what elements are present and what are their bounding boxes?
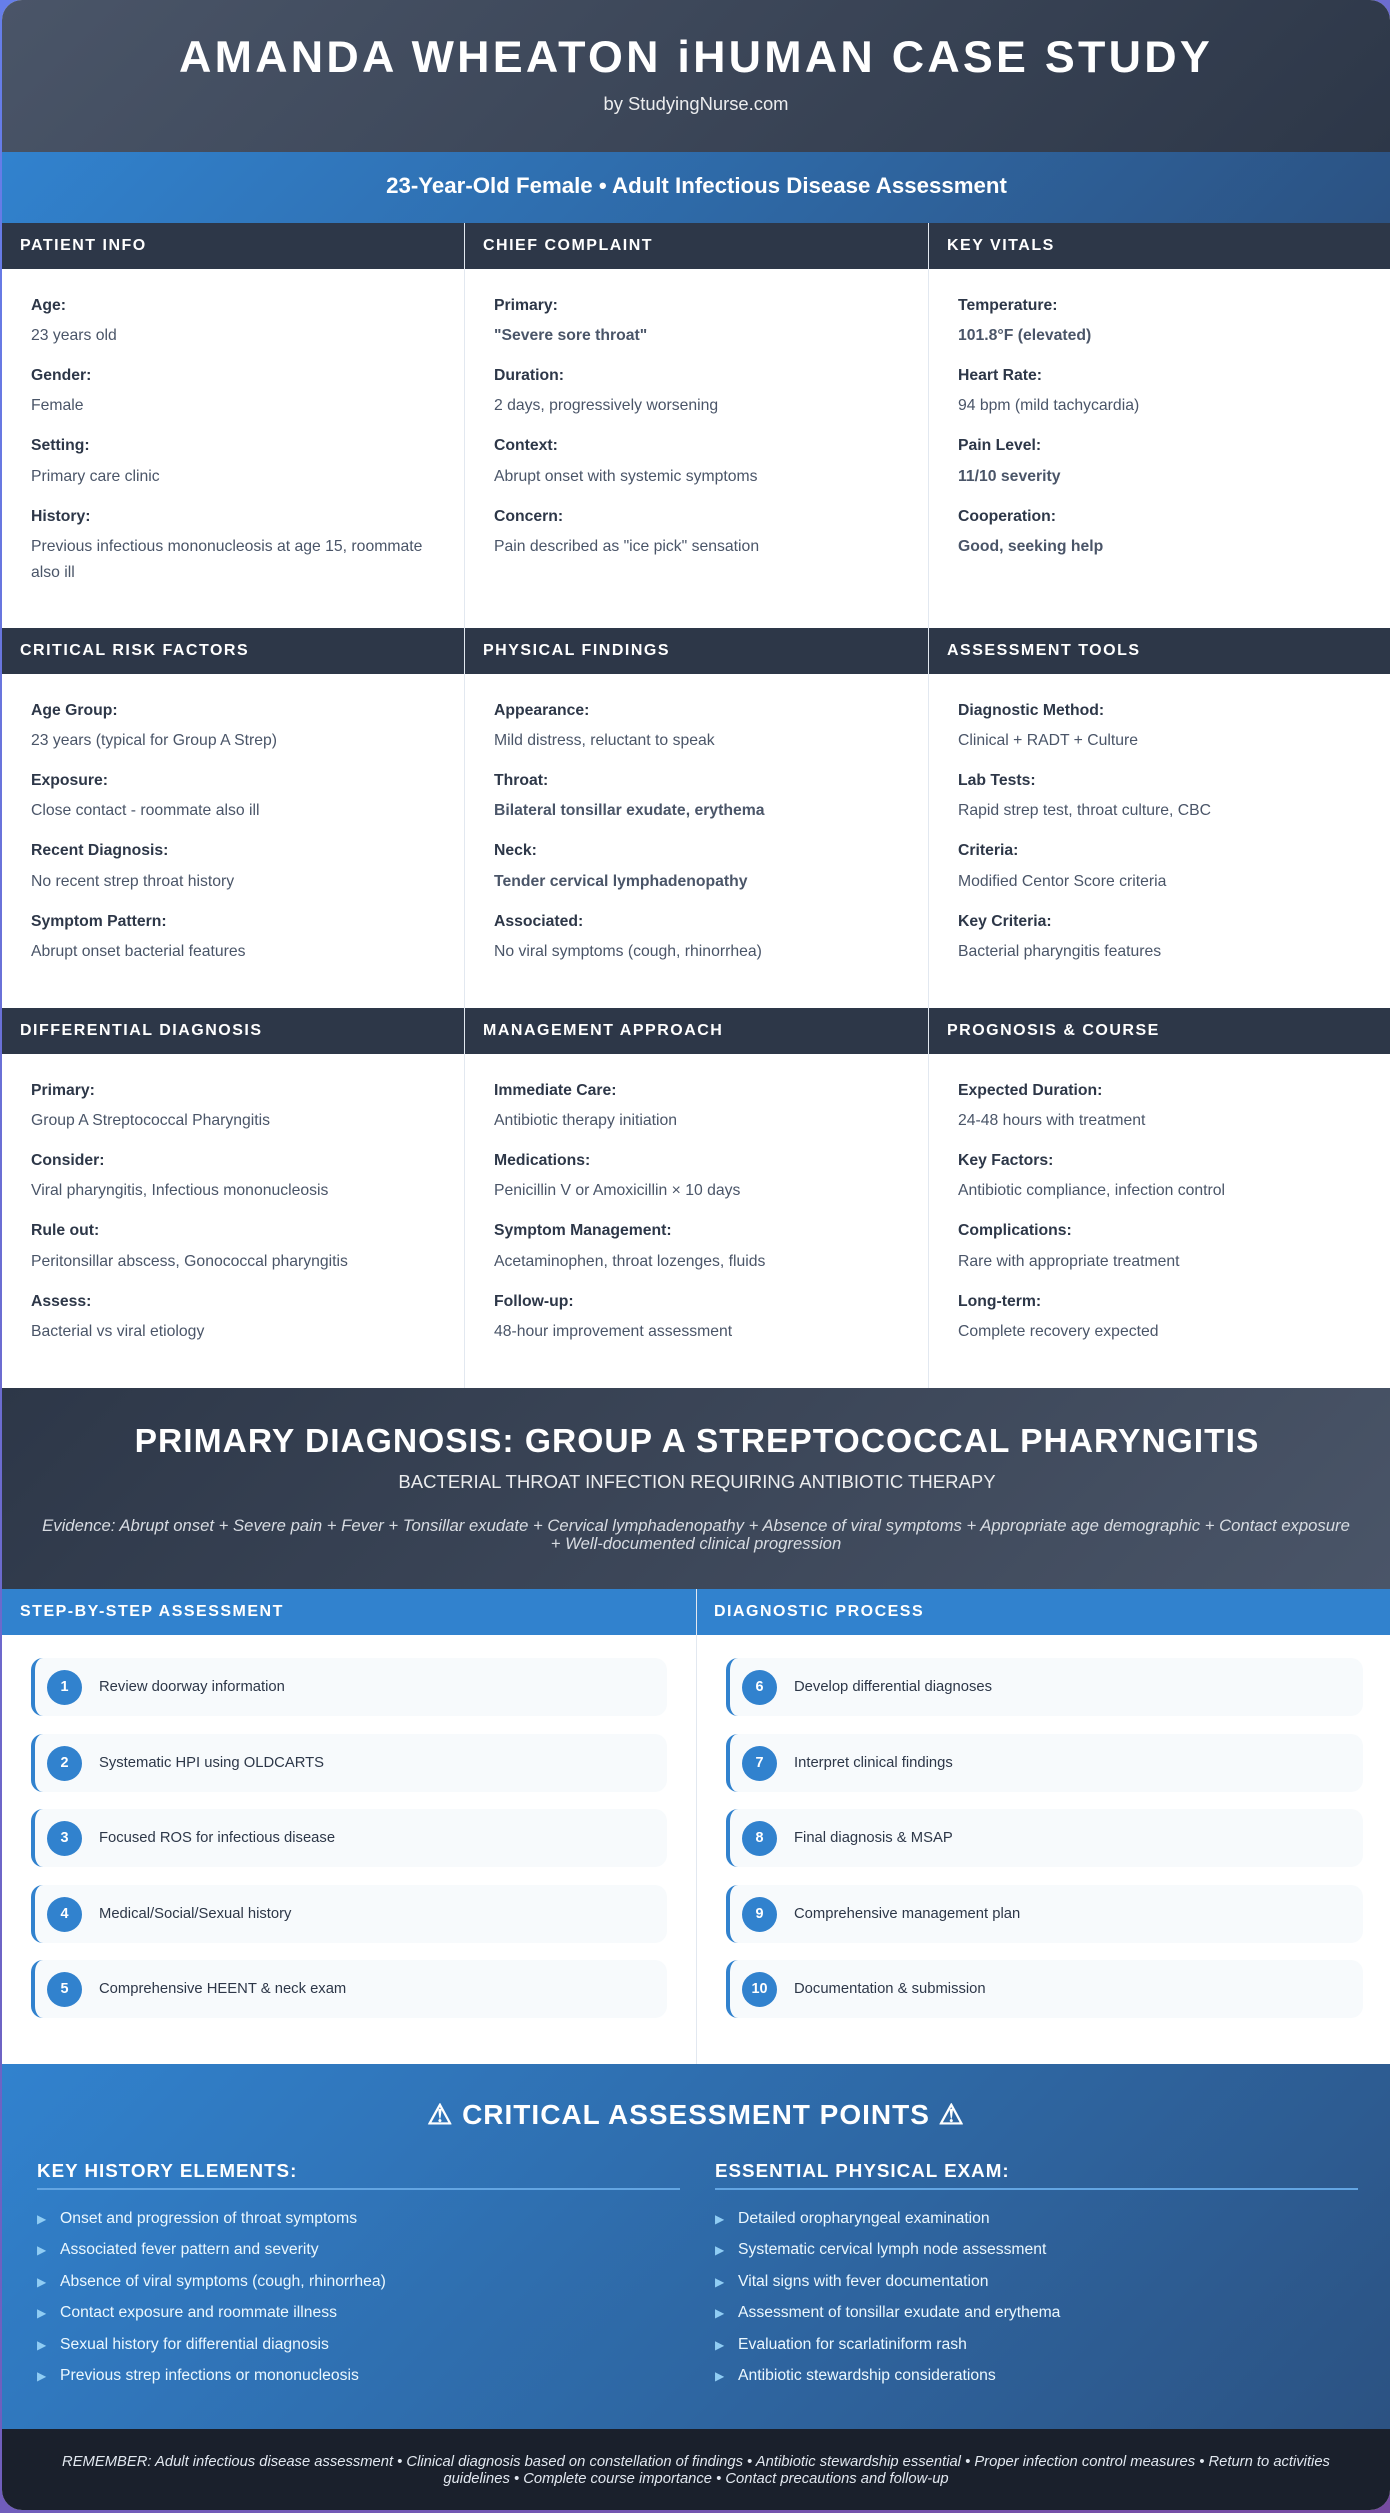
risk factors content: Recent Diagnosis: — [31, 842, 168, 859]
panel: differential diagnosis — [2, 1008, 465, 1388]
assessment tools content: Modified Centor Score criteria — [958, 873, 1166, 890]
exam item 1: ▶ — [715, 2212, 724, 2226]
physical findings content: Associated: — [494, 913, 583, 930]
differential diagnosis content: Peritonsillar abscess, Gonococcal pharyngitis — [31, 1253, 348, 1270]
step 10: Documentation & submission — [794, 1981, 986, 1997]
physical findings content: Appearance: — [494, 702, 589, 718]
heading: management approach: MANAGEMENT APPROACH — [483, 1022, 723, 1039]
risk factors content — [31, 702, 277, 960]
footer reminder — [2, 2429, 1390, 2510]
heading: assessment tools: ASSESSMENT TOOLS — [947, 642, 1141, 659]
reminder text — [62, 2454, 1330, 2487]
history item 4: Contact exposure and roommate illness — [60, 2304, 337, 2321]
step 8: Final diagnosis & MSAP — [794, 1830, 953, 1846]
exam item 5: ▶ — [715, 2338, 724, 2352]
reminder text: guidelines • Complete course importance • Contact precautions and follow-up — [443, 2471, 949, 2487]
step 3: Focused ROS for infectious disease — [99, 1830, 335, 1846]
step 8: 8 — [755, 1830, 764, 1846]
panel: key vitals — [929, 223, 1390, 628]
physical findings content: No viral symptoms (cough, rhinorrhea) — [494, 943, 762, 960]
key vitals content: Pain Level: — [958, 437, 1041, 454]
chief complaint content: "Severe sore throat" — [494, 327, 647, 344]
prognosis content — [958, 1082, 1225, 1340]
physical exam heading: ESSENTIAL PHYSICAL EXAM: — [715, 2160, 1010, 2181]
chief complaint content — [494, 296, 759, 555]
differential diagnosis content: Primary: — [31, 1082, 95, 1098]
differential diagnosis content: Group A Streptococcal Pharyngitis — [31, 1112, 270, 1129]
panel: chief complaint — [465, 223, 929, 628]
panel: primary diagnosis banner — [2, 1388, 1390, 1589]
assessment tools content — [958, 702, 1211, 960]
assessment tools content: Clinical + RADT + Culture — [958, 732, 1138, 749]
prognosis content: Complete recovery expected — [958, 1323, 1158, 1340]
assessment tools content: Bacterial pharyngitis features — [958, 943, 1161, 960]
evidence text: Evidence: Abrupt onset + Severe pain + Fever + Tonsillar exudate + Cervical lymphadenopathy + Absence of viral symptoms + Appropriate age demographic + Contact exposure — [42, 1516, 1350, 1534]
chief complaint content: Abrupt onset with systemic symptoms — [494, 468, 757, 485]
panel: critical assessment points — [2, 2064, 1390, 2429]
history item 2: ▶ — [37, 2243, 46, 2257]
heading: chief complaint: CHIEF COMPLAINT — [483, 237, 653, 254]
history item 3: Absence of viral symptoms (cough, rhinorrhea) — [60, 2273, 386, 2290]
step 9 — [726, 1884, 1363, 1942]
history item 4: ▶ — [37, 2306, 46, 2320]
management approach content: Follow-up: — [494, 1293, 574, 1310]
patient info content — [31, 296, 422, 581]
risk factors content: Exposure: — [31, 772, 108, 789]
chief complaint content: Duration: — [494, 367, 564, 384]
exam item 2: ▶ — [715, 2243, 724, 2257]
risk factors content: Close contact - roommate also ill — [31, 802, 259, 819]
step 5 — [31, 1960, 667, 2018]
evidence text: + Well-documented clinical progression — [551, 1534, 841, 1553]
exam item 4: ▶ — [715, 2306, 724, 2320]
patient info content: also ill — [31, 564, 75, 581]
patient info content: Female — [31, 397, 84, 414]
physical exam heading — [715, 2148, 1358, 2190]
heading: assessment tools — [929, 628, 1390, 674]
byline: by StudyingNurse.com — [603, 93, 788, 114]
prognosis content: Rare with appropriate treatment — [958, 1253, 1179, 1270]
subtitle text: 23-Year-Old Female • Adult Infectious Disease Assessment — [386, 173, 1007, 198]
reminder text: REMEMBER: Adult infectious disease assessment • Clinical diagnosis based on constellation of findings • Antibiotic stewardship essential • Proper infection control measures • Return to activities — [62, 2454, 1330, 2470]
panel: critical risk factors — [2, 628, 465, 1008]
physical findings content — [494, 702, 765, 960]
risk factors content: 23 years (typical for Group A Strep) — [31, 732, 277, 749]
exam item 5: Evaluation for scarlatiniform rash — [738, 2336, 967, 2353]
step 3: 3 — [60, 1830, 68, 1846]
key vitals content — [958, 296, 1139, 555]
management approach content: 48-hour improvement assessment — [494, 1323, 732, 1340]
step 9: 9 — [755, 1906, 764, 1922]
heading: differential diagnosis: DIFFERENTIAL DIAGNOSIS — [20, 1022, 262, 1039]
physical findings content: Throat: — [494, 772, 548, 789]
history item 5: ▶ — [37, 2338, 46, 2352]
differential diagnosis content: Consider: — [31, 1152, 105, 1169]
step 6 — [726, 1658, 1363, 1716]
diagnosis heading: PRIMARY DIAGNOSIS: GROUP A STREPTOCOCCAL PHARYNGITIS — [135, 1422, 1259, 1460]
step 4: Medical/Social/Sexual history — [99, 1906, 291, 1922]
heading: critical risk factors — [2, 628, 464, 674]
step 2 — [31, 1734, 667, 1792]
prognosis content: Expected Duration: — [958, 1082, 1102, 1098]
risk factors content: Symptom Pattern: — [31, 913, 167, 930]
step 1: Review doorway information — [99, 1679, 285, 1695]
panel: management approach — [465, 1008, 929, 1388]
chief complaint content: Primary: — [494, 296, 558, 314]
heading: prognosis and course: PROGNOSIS & COURSE — [947, 1022, 1160, 1039]
step 10: 10 — [751, 1981, 768, 1997]
assessment tools content: Key Criteria: — [958, 913, 1052, 930]
title: AMANDA WHEATON iHUMAN CASE STUDY — [179, 32, 1213, 82]
exam item 3: ▶ — [715, 2275, 724, 2289]
step 7: Interpret clinical findings — [794, 1754, 953, 1770]
heading: patient info — [2, 223, 464, 269]
evidence text — [42, 1516, 1350, 1553]
risk factors content: Age Group: — [31, 702, 118, 718]
risk factors content: Abrupt onset bacterial features — [31, 943, 246, 960]
chief complaint content: Context: — [494, 437, 558, 454]
assessment tools content: Rapid strep test, throat culture, CBC — [958, 802, 1211, 819]
history item 3: ▶ — [37, 2275, 46, 2289]
column: key history elements — [37, 2160, 680, 2384]
step 6: 6 — [755, 1679, 764, 1695]
panel: step-by-step assessment — [2, 1589, 697, 2064]
patient info content: Age: — [31, 296, 66, 314]
heading: step-by-step — [2, 1589, 696, 1635]
history item 2: Associated fever pattern and severity — [60, 2241, 319, 2258]
history item 1: ▶ — [37, 2212, 46, 2226]
critical heading: ⚠ CRITICAL ASSESSMENT POINTS ⚠ — [427, 2099, 965, 2130]
key vitals content: 101.8°F (elevated) — [958, 327, 1091, 344]
key vitals content: Heart Rate: — [958, 367, 1042, 384]
step 9: Comprehensive management plan — [794, 1906, 1020, 1922]
diagnosis subheading: BACTERIAL THROAT INFECTION REQUIRING ANTIBIOTIC THERAPY — [398, 1471, 996, 1492]
management approach content: Medications: — [494, 1152, 590, 1169]
differential diagnosis content — [31, 1082, 348, 1340]
chief complaint content: Concern: — [494, 508, 563, 525]
physical findings content: Mild distress, reluctant to speak — [494, 732, 715, 749]
physical findings content: Bilateral tonsillar exudate, erythema — [494, 802, 764, 819]
key vitals content: Good, seeking help — [958, 538, 1103, 555]
heading: physical findings: PHYSICAL FINDINGS — [483, 642, 670, 659]
history item 6: ▶ — [37, 2369, 46, 2383]
step 8 — [726, 1809, 1363, 1867]
history item 6: Previous strep infections or mononucleosis — [60, 2367, 359, 2384]
assessment tools content: Criteria: — [958, 842, 1018, 859]
header — [2, 0, 1390, 152]
patient info content: 23 years old — [31, 327, 117, 344]
step 6: Develop differential diagnoses — [794, 1679, 992, 1695]
subtitle band — [2, 152, 1390, 223]
step 4: 4 — [60, 1906, 68, 1922]
step 7: 7 — [755, 1754, 764, 1770]
exam item 4: Assessment of tonsillar exudate and erythema — [738, 2304, 1060, 2321]
panel: diagnostic process — [697, 1589, 1390, 2064]
patient info content: Primary care clinic — [31, 468, 160, 485]
step 2: Systematic HPI using OLDCARTS — [99, 1754, 324, 1770]
differential diagnosis content: Rule out: — [31, 1222, 99, 1239]
step 5: Comprehensive HEENT & neck exam — [99, 1981, 346, 1997]
management approach content: Acetaminophen, throat lozenges, fluids — [494, 1253, 765, 1270]
heading: critical risk factors: CRITICAL RISK FACTORS — [20, 642, 249, 659]
prognosis content: Antibiotic compliance, infection control — [958, 1182, 1225, 1199]
patient info content: History: — [31, 508, 91, 525]
patient info content: Previous infectious mononucleosis at age 15, roommate — [31, 538, 422, 555]
panel: prognosis and course — [929, 1008, 1390, 1388]
risk factors content: No recent strep throat history — [31, 873, 234, 890]
prognosis content: Key Factors: — [958, 1152, 1053, 1169]
step 1 — [31, 1658, 667, 1716]
panel: physical findings — [465, 628, 929, 1008]
heading: prognosis and course — [929, 1008, 1390, 1054]
column: essential physical exam — [715, 2160, 1358, 2384]
panel: patient info — [2, 223, 465, 628]
step 1: 1 — [60, 1679, 68, 1695]
heading: diagnostic process — [697, 1589, 1390, 1635]
key vitals content: Cooperation: — [958, 508, 1056, 525]
heading: key vitals: KEY VITALS — [947, 237, 1055, 254]
prognosis content: 24-48 hours with treatment — [958, 1112, 1145, 1129]
differential diagnosis content: Assess: — [31, 1293, 91, 1310]
exam item 6: Antibiotic stewardship considerations — [738, 2367, 996, 2384]
exam item 2: Systematic cervical lymph node assessment — [738, 2241, 1046, 2258]
exam item 6: ▶ — [715, 2369, 724, 2383]
step 3 — [31, 1809, 667, 1867]
differential diagnosis content: Bacterial vs viral etiology — [31, 1323, 204, 1340]
history item 1: Onset and progression of throat symptoms — [60, 2210, 357, 2227]
heading: key vitals — [929, 223, 1390, 269]
prognosis content: Long-term: — [958, 1293, 1041, 1310]
management approach content: Immediate Care: — [494, 1082, 617, 1098]
patient info content: Setting: — [31, 437, 90, 454]
step 5: 5 — [60, 1981, 68, 1997]
management approach content: Symptom Management: — [494, 1222, 672, 1239]
management approach content: Penicillin V or Amoxicillin × 10 days — [494, 1182, 740, 1199]
step 4 — [31, 1884, 667, 1942]
panel: assessment tools — [929, 628, 1390, 1008]
step 7 — [726, 1734, 1363, 1792]
history item 5: Sexual history for differential diagnosis — [60, 2336, 329, 2353]
heading: chief complaint — [465, 223, 928, 269]
key history heading: KEY HISTORY ELEMENTS: — [37, 2160, 297, 2181]
heading: differential diagnosis — [2, 1008, 464, 1054]
heading: diagnostic process: DIAGNOSTIC PROCESS — [714, 1603, 924, 1620]
heading: step-by-step: STEP-BY-STEP ASSESSMENT — [20, 1603, 284, 1620]
chief complaint content: Pain described as "ice pick" sensation — [494, 538, 759, 555]
prognosis content: Complications: — [958, 1222, 1072, 1239]
heading: management approach — [465, 1008, 928, 1054]
heading: patient info: PATIENT INFO — [20, 237, 147, 254]
step 10 — [726, 1960, 1363, 2018]
exam item 1: Detailed oropharyngeal examination — [738, 2210, 990, 2227]
management approach content: Antibiotic therapy initiation — [494, 1112, 677, 1129]
assessment tools content: Lab Tests: — [958, 772, 1036, 789]
management approach content — [494, 1082, 765, 1340]
assessment tools content: Diagnostic Method: — [958, 702, 1104, 718]
exam item 3: Vital signs with fever documentation — [738, 2273, 988, 2290]
heading: physical findings — [465, 628, 928, 674]
physical findings content: Tender cervical lymphadenopathy — [494, 873, 748, 890]
key vitals content: 94 bpm (mild tachycardia) — [958, 397, 1139, 414]
physical findings content: Neck: — [494, 842, 537, 859]
step 2: 2 — [60, 1754, 68, 1770]
chief complaint content: 2 days, progressively worsening — [494, 397, 718, 414]
key vitals content: 11/10 severity — [958, 468, 1060, 485]
patient info content: Gender: — [31, 367, 91, 384]
differential diagnosis content: Viral pharyngitis, Infectious mononucleosis — [31, 1182, 328, 1199]
key vitals content: Temperature: — [958, 296, 1057, 314]
key history heading — [37, 2148, 680, 2190]
